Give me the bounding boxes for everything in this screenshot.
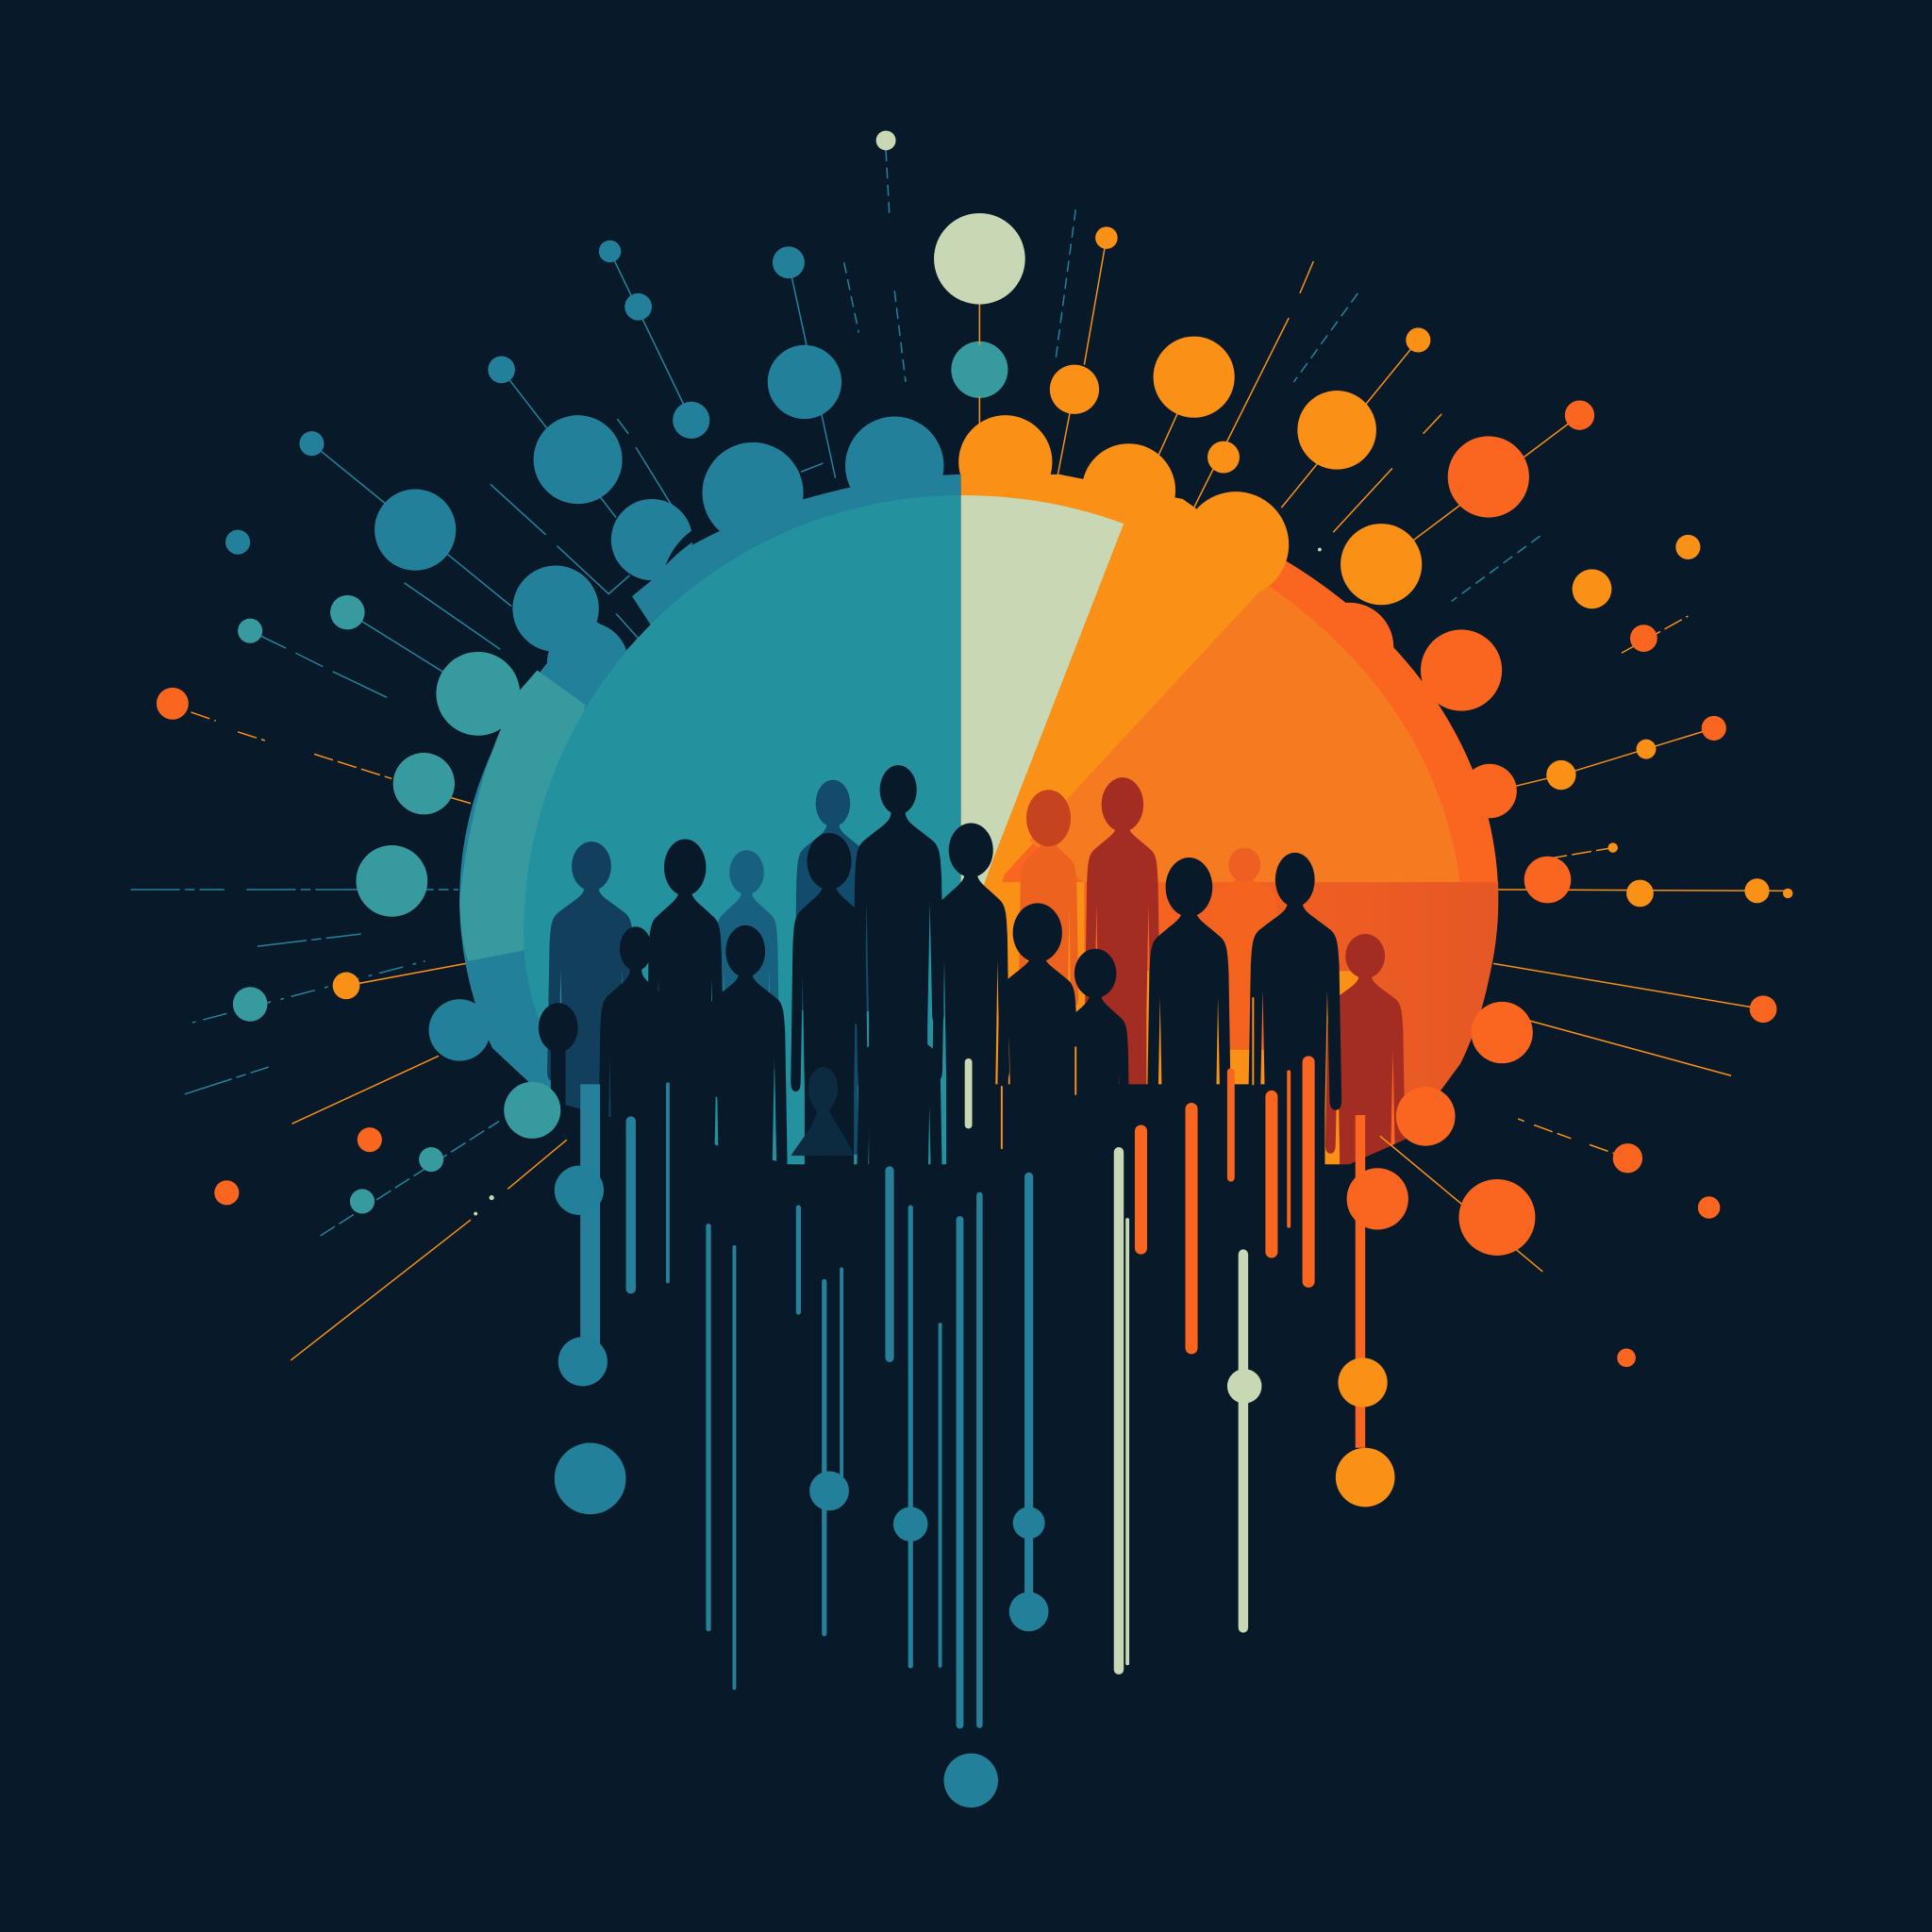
- pie bump: amber centre: [958, 415, 1052, 508]
- pie right amber lower wedge: [991, 882, 1386, 1183]
- faded figure: blue 2: [714, 850, 779, 1205]
- line under cream node: [978, 305, 980, 425]
- dark notch in left ring: [492, 555, 659, 677]
- figure: [646, 839, 724, 1256]
- data nodes: orange: [157, 400, 1776, 1367]
- pie bump: orange right: [1305, 603, 1393, 691]
- data nodes: teal: [233, 341, 1008, 1214]
- pie bump: blue left: [702, 442, 804, 543]
- small head: [539, 1003, 578, 1052]
- orange drips: [1141, 1062, 1360, 1448]
- pie left inner sector: [524, 495, 961, 1183]
- cream drips: [969, 1062, 1243, 1670]
- faded figure: red 2: [1085, 777, 1160, 1156]
- pie bump: blue centre: [845, 416, 943, 515]
- figure: [1248, 853, 1341, 1268]
- figure: [791, 833, 868, 1249]
- pie bump: amber middle: [1082, 443, 1175, 537]
- amber slits: [1002, 998, 1253, 1148]
- figure: [598, 926, 674, 1319]
- pie lower right sector: [1084, 882, 1498, 1140]
- small neck: [551, 1047, 566, 1134]
- background silhouettes: [547, 777, 1405, 1289]
- vertical drips: [591, 998, 1360, 1725]
- pie bump: blue lower: [547, 623, 628, 704]
- panel: split pie chart: [459, 415, 1498, 1324]
- data nodes: amber: [333, 226, 1792, 1507]
- figure: [932, 823, 1009, 1239]
- data nodes: cream: [474, 130, 1322, 1404]
- lower cover hiding pie bottom: [370, 1047, 1602, 1417]
- pie left outer ring: [459, 475, 961, 1324]
- foreground silhouettes: [539, 765, 1341, 1370]
- figure: lower middle: [857, 957, 942, 1370]
- figure: [1060, 949, 1130, 1324]
- figure: [704, 925, 788, 1321]
- figure: [853, 765, 944, 1185]
- pie bump: amber large: [1183, 491, 1289, 597]
- blue drips: [591, 1084, 1029, 1725]
- pie right orange sector: [1029, 584, 1460, 882]
- small child silhouette: [791, 1067, 854, 1156]
- pie right outer ring: [961, 475, 1498, 1324]
- orange lines: [191, 238, 1788, 1360]
- teal lines: [130, 150, 1541, 1236]
- data nodes: blue: [225, 241, 1049, 1807]
- pie bump: blue upper: [611, 499, 692, 580]
- faded figure: orange 1: [1019, 790, 1078, 1134]
- figure: [1147, 858, 1231, 1275]
- radiating lines: [130, 150, 1788, 1360]
- faded figure: blue 3: [794, 780, 872, 1155]
- pie cream wedge: [961, 495, 1124, 949]
- pie right amber sector: [961, 475, 1281, 924]
- faded figure: orange 3: [1211, 848, 1278, 1050]
- faded figure: red 4: [1325, 934, 1405, 1289]
- faded figure: blue 1: [547, 841, 636, 1228]
- pie left teal segment: [459, 671, 585, 961]
- crescent notch: [665, 526, 715, 566]
- figure: [996, 903, 1078, 1303]
